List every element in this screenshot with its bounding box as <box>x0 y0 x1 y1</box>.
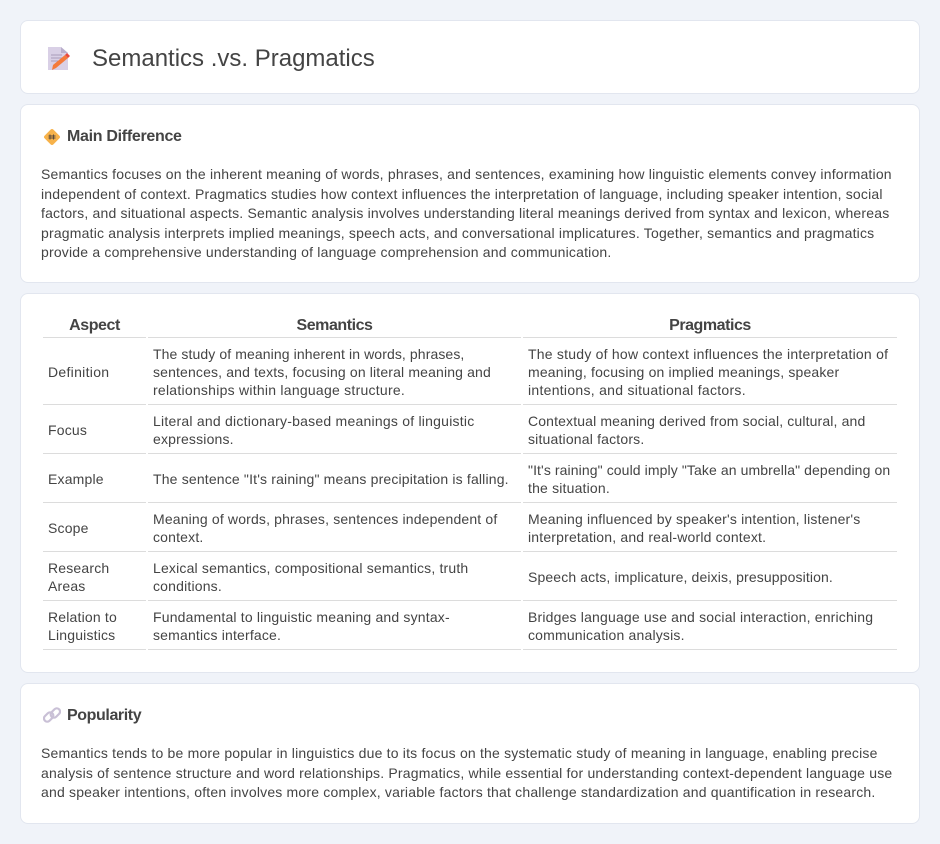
text: The study of how context influences the interpretation of <box>528 346 888 362</box>
text: expressions. <box>153 431 234 447</box>
panel: main difference <box>20 104 920 283</box>
text: factors, and situational aspects. Semantic analysis involves understanding literal meanings derived from syntax and lexicon, whereas <box>41 205 889 221</box>
icon: chain link <box>43 707 61 723</box>
text: Contextual meaning derived from social, cultural, and <box>528 413 865 429</box>
text: Areas <box>48 578 85 594</box>
panel: header <box>20 20 920 94</box>
table row: example <box>48 462 890 496</box>
text: Research <box>48 560 109 576</box>
text: Linguistics <box>48 627 115 643</box>
table header: semantics: Semantics <box>296 317 372 334</box>
table row: relation to linguistics <box>48 609 873 643</box>
text block: popularity <box>41 745 892 800</box>
text: "It's raining" could imply "Take an umbrella" depending on <box>528 462 890 478</box>
panel: comparison table <box>20 293 920 673</box>
heading: popularity: Popularity <box>67 707 141 724</box>
text: Example <box>48 471 104 487</box>
table header: pragmatics: Pragmatics <box>669 317 751 334</box>
text: Meaning of words, phrases, sentences independent of <box>153 511 497 527</box>
text block: main difference <box>41 166 892 260</box>
text: Speech acts, implicature, deixis, presupposition. <box>528 569 833 585</box>
text: Meaning influenced by speaker's intention, listener's <box>528 511 860 527</box>
text: Fundamental to linguistic meaning and syntax- <box>153 609 450 625</box>
text: The study of meaning inherent in words, phrases, <box>153 346 464 362</box>
text: Semantics tends to be more popular in linguistics due to its focus on the systematic study of meaning in language, enabling precise <box>41 745 878 761</box>
text: Focus <box>48 422 87 438</box>
text: semantics interface. <box>153 627 281 643</box>
text: Bridges language use and social interaction, enriching <box>528 609 873 625</box>
text: the situation. <box>528 480 610 496</box>
text: context. <box>153 529 203 545</box>
text: relationships within language structure. <box>153 382 405 398</box>
text: independent of context. Pragmatics studies how context influences the interpretation of language, including speaker intention, social <box>41 186 883 202</box>
text: situational factors. <box>528 431 644 447</box>
text: provide a comprehensive understanding of language comprehension and communication. <box>41 244 612 260</box>
heading: main difference: Main Difference <box>67 128 182 145</box>
title: Semantics .vs. Pragmatics <box>92 45 375 72</box>
text: The sentence "It's raining" means precipitation is falling. <box>153 471 509 487</box>
text: intentions, and situational factors. <box>528 382 746 398</box>
icon: document with pencil <box>48 47 70 70</box>
text: meaning, focusing on implied meanings, speaker <box>528 364 839 380</box>
text: Relation to <box>48 609 117 625</box>
text: interpretation, and real-world context. <box>528 529 766 545</box>
text: conditions. <box>153 578 222 594</box>
text: Scope <box>48 520 89 536</box>
text: and speaker intentions, often involves more complex, variable factors that challenge standardization and quantification in research. <box>41 784 875 800</box>
text: Lexical semantics, compositional semantics, truth <box>153 560 468 576</box>
table row: scope <box>48 511 860 545</box>
table row: definition <box>48 346 888 398</box>
table row: research areas <box>48 560 833 594</box>
table header: aspect: Aspect <box>69 317 120 334</box>
text: pragmatic analysis interprets implied meanings, speech acts, and conversational implicatures. Together, semantics and pragmatics <box>41 225 874 241</box>
icon: diamond sign <box>44 129 60 145</box>
text: analysis of sentence structure and word relationships. Pragmatics, while essential for understanding context-dependent language use <box>41 765 892 781</box>
text: sentences, and texts, focusing on literal meaning and <box>153 364 491 380</box>
text: Semantics focuses on the inherent meaning of words, phrases, and sentences, examining how linguistic elements convey information <box>41 166 892 182</box>
text: Literal and dictionary-based meanings of linguistic <box>153 413 474 429</box>
table row: focus <box>48 413 865 447</box>
panel: popularity <box>20 683 920 824</box>
text: Definition <box>48 364 109 380</box>
text: communication analysis. <box>528 627 685 643</box>
